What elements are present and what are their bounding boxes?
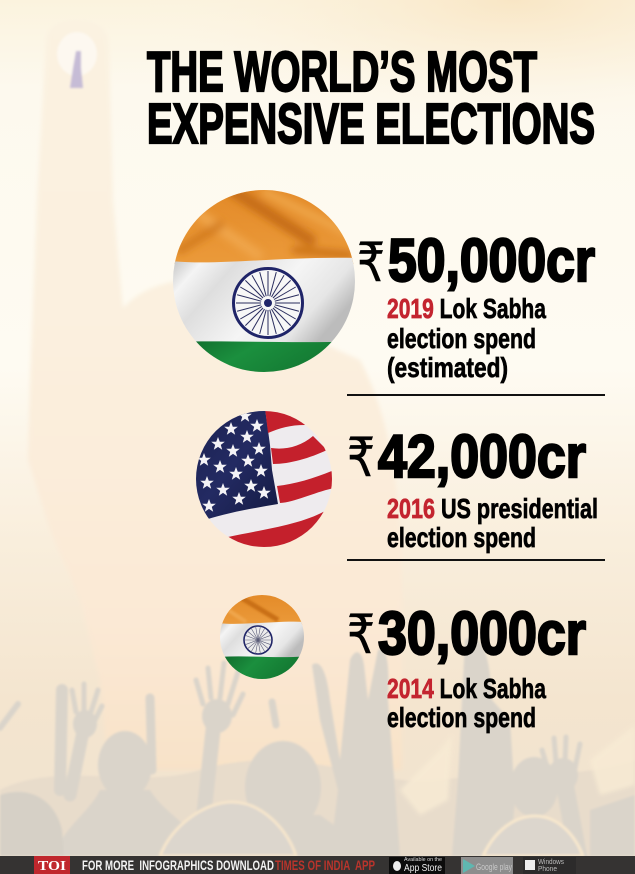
figure: 42,000cr: ₹	[347, 428, 375, 488]
front heads with bright rim	[160, 802, 296, 856]
bright light gaps	[402, 761, 634, 813]
footer bar: FOR MORE INFOGRAPHICS DOWNLOAD	[82, 857, 274, 873]
Windows Phone badge: Phone	[538, 866, 557, 873]
left hands and arms	[0, 660, 280, 810]
far back crowd tone	[1, 761, 634, 838]
caption: 2014 Lok Sabha: 2014 Lok Sabha	[387, 673, 546, 704]
caption: 2019 Lok Sabha	[387, 293, 546, 383]
flag: USA	[196, 411, 332, 547]
figure: 30,000cr: ₹	[347, 605, 375, 665]
figure: 50,000cr: ₹	[357, 233, 385, 293]
flag: India large	[170, 188, 360, 375]
caption: 2016 US presidential	[387, 493, 598, 553]
App Store badge: Available on the	[404, 857, 442, 863]
title	[147, 40, 595, 156]
centre raised arms	[312, 649, 400, 856]
caption: 2014 Lok Sabha	[387, 673, 546, 733]
figure: 50,000cr: 50,000cr	[388, 227, 595, 294]
TOI badge: TOI	[38, 859, 66, 874]
Windows Phone badge: Windows	[538, 859, 564, 866]
caption: 2014 Lok Sabha: election spend	[387, 702, 536, 733]
TOI badge	[34, 856, 70, 874]
right hand	[542, 737, 580, 856]
right raised arms	[452, 638, 515, 856]
footer bar	[0, 856, 635, 874]
footer bar: TIMES OF INDIA APP	[275, 857, 375, 873]
right shoulder	[590, 795, 635, 856]
Google play badge: Google play	[476, 862, 512, 872]
caption: 2019 Lok Sabha: (estimated)	[387, 352, 508, 383]
App Store badge: App Store	[404, 863, 442, 874]
figure: 30,000cr: 30,000cr	[378, 600, 586, 667]
caption: 2016 US presidential: election spend	[387, 522, 536, 553]
heads and bodies	[98, 730, 151, 790]
App Store badge	[389, 857, 445, 874]
raised finger and hand	[28, 20, 402, 770]
Windows Phone badge	[523, 857, 576, 874]
caption: 2019 Lok Sabha: 2019 Lok Sabha	[387, 293, 546, 324]
crowd silhouettes	[0, 638, 635, 856]
ink mark on finger	[57, 32, 97, 88]
figure: 42,000cr: 42,000cr	[378, 423, 586, 490]
flag: India small	[220, 595, 304, 679]
Google play badge	[461, 857, 513, 874]
caption: 2019 Lok Sabha: election spend	[387, 323, 536, 354]
